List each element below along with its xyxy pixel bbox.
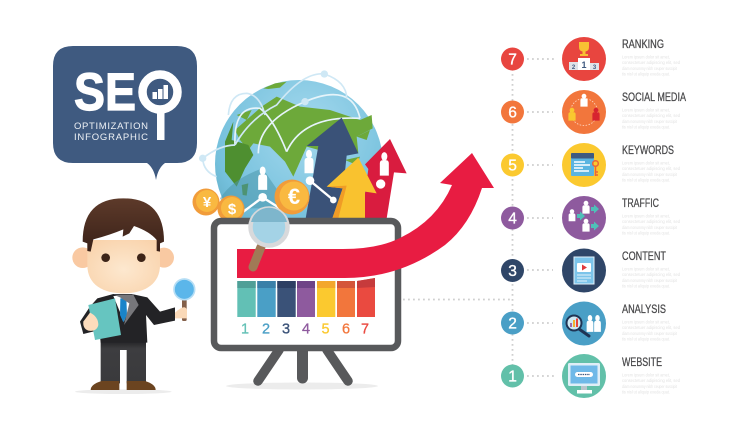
icon: magnifier and people — [562, 302, 606, 346]
icon: document with video — [562, 248, 606, 292]
social media text: consectetuer adipiscing elit, sed — [622, 113, 680, 118]
social media text: SOCIAL MEDIA — [622, 92, 686, 104]
content text — [622, 251, 680, 289]
coin: euro: € — [288, 184, 300, 209]
jacket and arm — [80, 294, 175, 343]
icon: podium and trophy: 2 — [572, 65, 576, 71]
content text: CONTENT — [622, 251, 666, 263]
bar numbers: 3 — [282, 322, 290, 338]
head — [72, 198, 174, 293]
keywords text: KEYWORDS — [622, 145, 674, 157]
bar numbers — [241, 322, 369, 338]
number badge 6 — [501, 100, 524, 124]
analysis text: consectetuer adipiscing elit, sed — [622, 325, 680, 330]
number badge 1: 1 — [508, 368, 517, 386]
number badge 2: 2 — [508, 316, 517, 332]
red up arrow — [362, 139, 407, 218]
social media text — [622, 92, 686, 130]
SEO heading: SE — [74, 63, 136, 122]
social media text: diam nonummy nibh ceuper suscipit — [622, 119, 678, 124]
icon: podium and trophy — [562, 37, 606, 81]
SEO speech bubble — [53, 46, 197, 180]
shoes — [91, 381, 156, 390]
number badge 2 — [501, 312, 524, 334]
businessman character — [72, 198, 195, 394]
analysis text — [622, 304, 680, 342]
globe — [215, 80, 383, 248]
bar numbers: 1 — [241, 322, 249, 338]
shadow — [226, 382, 378, 390]
keywords text — [622, 145, 680, 183]
folder — [88, 298, 121, 340]
website text: diam nonummy nibh ceuper suscipit — [622, 384, 678, 389]
route lines — [203, 74, 360, 177]
subtitle: INFOGRAPHIC — [74, 132, 148, 143]
icon: desktop monitor — [562, 354, 606, 398]
board frame — [214, 221, 398, 348]
icon: browser and key — [562, 143, 606, 187]
number badge 7 — [501, 48, 524, 70]
step 1: website — [501, 354, 680, 398]
keywords text: diam nonummy nibh ceuper suscipit — [622, 172, 678, 177]
board magnifier — [250, 208, 288, 267]
left hand — [83, 313, 98, 331]
number badge 6: 6 — [508, 104, 517, 122]
number badge 5 — [501, 154, 524, 176]
presentation board — [214, 153, 494, 390]
traffic text: Lorem ipsum dolor sit amet, — [622, 213, 670, 218]
social media text: tis nisl ut aliquip exeda quat. — [622, 125, 670, 130]
analysis text: Lorem ipsum dolor sit amet, — [622, 319, 670, 324]
shirt and tie — [113, 295, 139, 325]
step 5: keywords — [501, 143, 680, 187]
ranking text: consectetuer adipiscing elit, sed — [622, 60, 680, 65]
step 4: traffic — [501, 196, 680, 240]
website text: consectetuer adipiscing elit, sed — [622, 378, 680, 383]
number badge 3 — [501, 259, 524, 282]
traffic text: TRAFFIC — [622, 198, 659, 210]
number badge 1 — [501, 364, 524, 388]
bar numbers: 2 — [262, 322, 270, 338]
keywords text: consectetuer adipiscing elit, sed — [622, 166, 680, 171]
content text: Lorem ipsum dolor sit amet, — [622, 266, 670, 271]
colour bars — [237, 278, 375, 317]
traffic text — [622, 198, 680, 236]
keywords text: tis nisl ut aliquip exeda quat. — [622, 178, 670, 183]
number badge 4: 4 — [508, 210, 517, 228]
website text: tis nisl ut aliquip exeda quat. — [622, 390, 670, 395]
social media text: Lorem ipsum dolor sit amet, — [622, 107, 670, 112]
icon: podium and trophy: 3 — [593, 65, 597, 71]
icon: podium and trophy: 1 — [581, 60, 587, 70]
number badge 5: 5 — [508, 158, 517, 174]
easel legs — [258, 350, 348, 381]
bar numbers: 4 — [302, 322, 310, 338]
website text: Lorem ipsum dolor sit amet, — [622, 372, 670, 377]
website text — [622, 357, 680, 395]
step 7: ranking — [501, 37, 680, 81]
step 2: analysis — [501, 302, 680, 346]
content text: diam nonummy nibh ceuper suscipit — [622, 278, 678, 283]
content text: consectetuer adipiscing elit, sed — [622, 272, 680, 277]
coin: dollar: $ — [228, 201, 237, 218]
number badge 4 — [501, 206, 524, 230]
network connectors and people — [243, 150, 389, 212]
content text: tis nisl ut aliquip exeda quat. — [622, 284, 670, 289]
coins — [192, 180, 310, 222]
yellow up arrow — [327, 158, 377, 218]
analysis text: tis nisl ut aliquip exeda quat. — [622, 337, 670, 342]
ranking text — [622, 39, 680, 77]
bar numbers: 6 — [342, 322, 350, 338]
subtitle — [74, 121, 148, 143]
subtitle: OPTIMIZATION — [74, 121, 148, 132]
number badge 3: 3 — [508, 263, 517, 280]
icon: people and arrows — [562, 196, 606, 240]
traffic text: tis nisl ut aliquip exeda quat. — [622, 231, 670, 236]
analysis text: ANALYSIS — [622, 304, 666, 316]
large red growth arrow — [237, 153, 494, 278]
traffic text: consectetuer adipiscing elit, sed — [622, 219, 680, 224]
bar numbers: 5 — [321, 322, 330, 338]
ranking text: RANKING — [622, 39, 664, 51]
website text: WEBSITE — [622, 357, 662, 369]
ranking text: Lorem ipsum dolor sit amet, — [622, 54, 670, 59]
step 3: content — [501, 248, 680, 292]
hair — [83, 198, 164, 252]
globe with arrows — [199, 70, 407, 248]
coin: yen: ¥ — [203, 194, 212, 211]
navy up arrow — [306, 118, 358, 218]
icon: social circle — [562, 90, 606, 134]
keywords text: Lorem ipsum dolor sit amet, — [622, 160, 670, 165]
step 6: social media — [501, 90, 686, 134]
connector dots — [403, 59, 555, 376]
analysis text: diam nonummy nibh ceuper suscipit — [622, 331, 678, 336]
traffic text: diam nonummy nibh ceuper suscipit — [622, 225, 678, 230]
magnifier O icon — [142, 74, 178, 140]
trousers — [101, 340, 146, 383]
continents — [220, 82, 373, 208]
ranking text: diam nonummy nibh ceuper suscipit — [622, 66, 678, 71]
number badge 7: 7 — [508, 52, 517, 68]
magnifier in hand — [174, 279, 195, 321]
ranking text: tis nisl ut aliquip exeda quat. — [622, 72, 670, 77]
bar numbers: 7 — [361, 322, 369, 338]
